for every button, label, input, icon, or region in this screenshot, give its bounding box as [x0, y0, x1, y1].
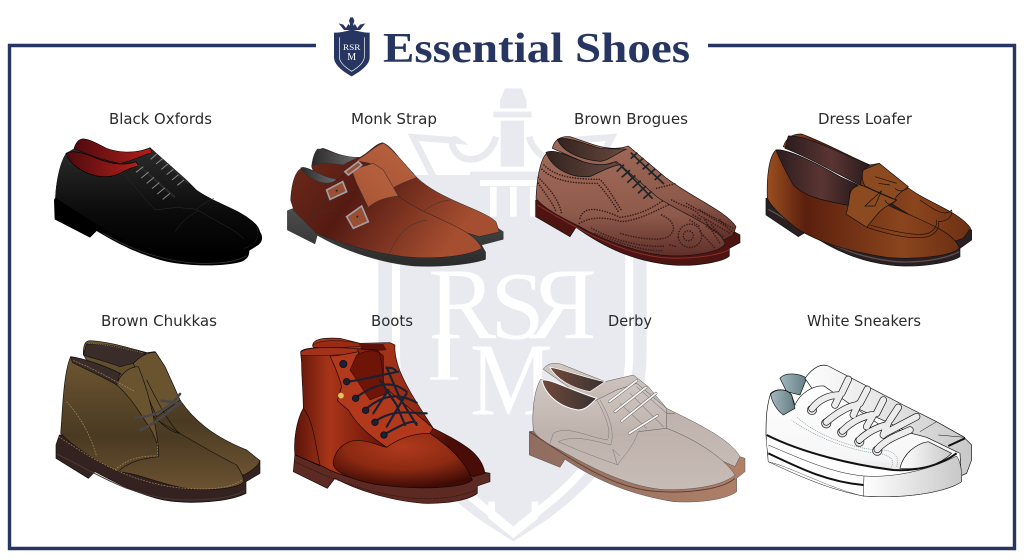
- background watermark: RSM crest: R: [529, 247, 597, 360]
- background watermark: RSM crest: [357, 67, 657, 542]
- label: Derby: Derby: [608, 312, 652, 330]
- logo: crest: [334, 17, 370, 76]
- shoe: brown brogues: [536, 137, 740, 265]
- shoe: dress loafer: [766, 134, 972, 266]
- shoe: derby: [529, 363, 745, 502]
- label: Black Oxfords: Black Oxfords: [109, 110, 212, 128]
- shoe: monk strap: [287, 143, 503, 266]
- label: Brown Chukkas: Brown Chukkas: [101, 312, 217, 330]
- logo: crest: RSR: [343, 42, 361, 52]
- shoe: white sneakers: [766, 365, 972, 497]
- label: Boots: Boots: [371, 312, 413, 330]
- background watermark: RSM crest: R: [428, 247, 496, 360]
- shoe: brown chukkas: [56, 341, 260, 502]
- label: White Sneakers: White Sneakers: [807, 312, 921, 330]
- background watermark: RSM crest: M: [470, 323, 553, 437]
- shoe: black oxfords: [54, 139, 262, 265]
- background watermark: RSM crest: S: [491, 252, 544, 359]
- label: Brown Brogues: Brown Brogues: [574, 110, 688, 128]
- label: Monk Strap: Monk Strap: [351, 110, 437, 128]
- shoe: boots: [293, 338, 490, 503]
- logo: crest: M: [347, 52, 356, 63]
- title: Essential Shoes: [383, 26, 690, 72]
- label: Dress Loafer: Dress Loafer: [818, 110, 913, 128]
